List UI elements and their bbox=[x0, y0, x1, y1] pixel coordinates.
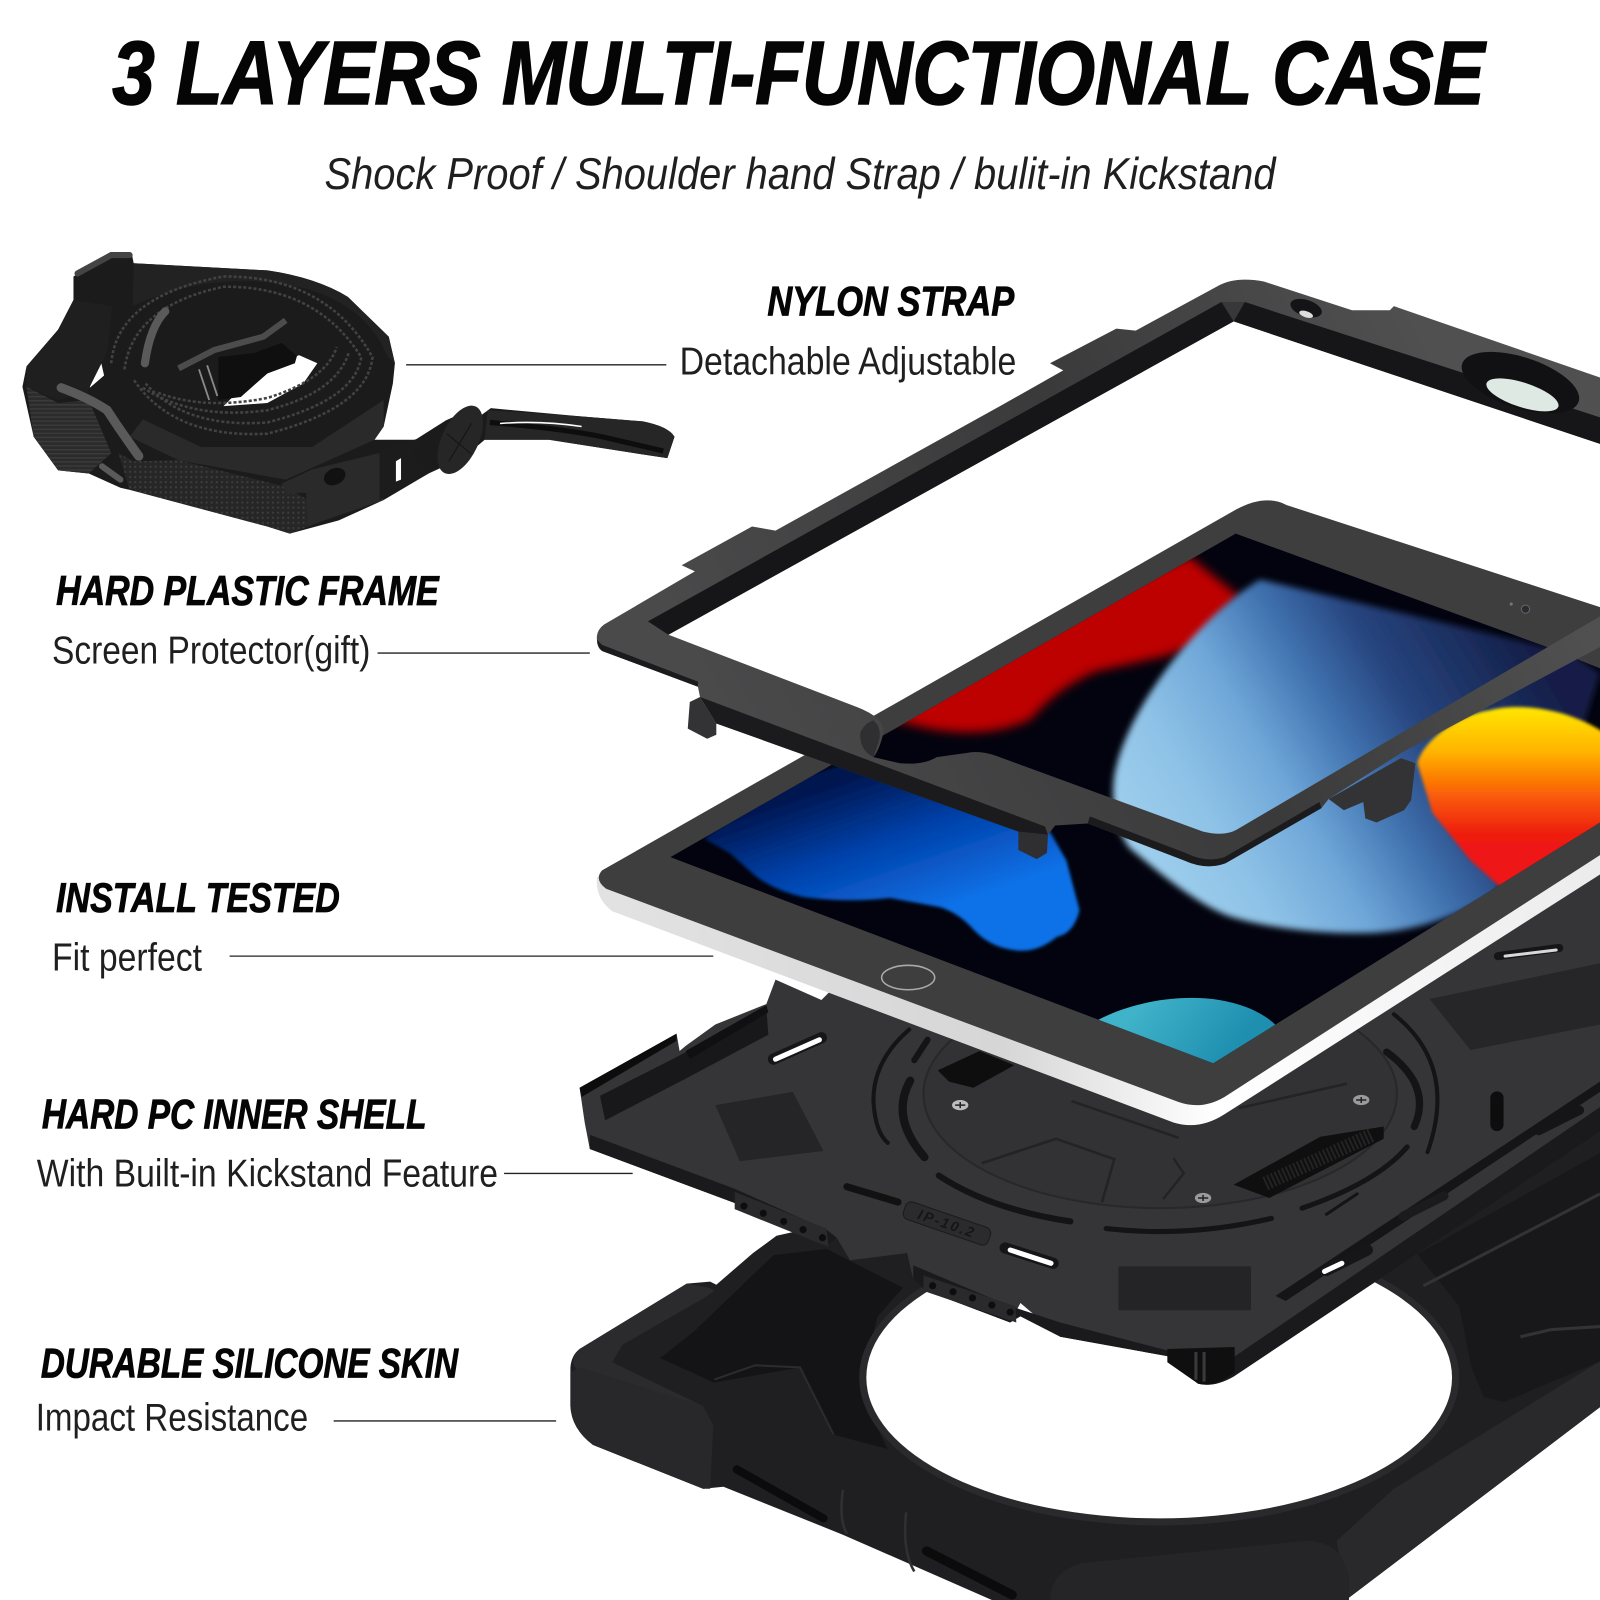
home button bbox=[882, 965, 935, 990]
label: durable silicone skin: Impact Resistance bbox=[36, 1397, 308, 1440]
rotating disk bbox=[873, 980, 1437, 1232]
round hole bbox=[866, 1237, 1452, 1518]
inner wall shadow bbox=[648, 302, 1600, 635]
leader line: strap bbox=[406, 364, 666, 366]
connector with holes left bbox=[735, 1192, 829, 1247]
camera bbox=[1510, 603, 1530, 613]
screen wallpaper bbox=[653, 510, 1600, 1082]
layer: hard pc inner shell bbox=[580, 857, 1600, 1385]
subtitle: Shock Proof / Shoulder hand Strap / bulit-in Kickstand bbox=[324, 148, 1277, 199]
corner hinge bbox=[1167, 1347, 1235, 1385]
right rim ledge bbox=[1276, 1082, 1600, 1301]
label: hard plastic frame: Screen Protector(gift) bbox=[52, 629, 370, 672]
grip pads bbox=[715, 1092, 823, 1161]
model label: IP-10.2 bbox=[915, 1207, 978, 1242]
lower kickstand bump bbox=[1050, 1541, 1349, 1600]
leader line: frame bbox=[378, 652, 590, 654]
label: durable silicone skin: DURABLE SILICONE SKIN bbox=[41, 1340, 459, 1387]
leader line: shell bbox=[504, 1172, 633, 1174]
notch bevel bbox=[860, 720, 880, 757]
hole rim bbox=[859, 1230, 1459, 1526]
black block bbox=[938, 1051, 1014, 1088]
leader line: silicone bbox=[334, 1420, 556, 1422]
screws bbox=[952, 1095, 1369, 1203]
coil webbing bbox=[111, 277, 372, 434]
lower plastic buckle bbox=[282, 437, 429, 527]
metal slider rings bbox=[61, 255, 165, 480]
label: hard pc inner shell: With Built-in Kickstand Feature bbox=[37, 1153, 498, 1196]
wrist loop bbox=[485, 410, 674, 458]
side slots bbox=[737, 1469, 823, 1518]
frame body bbox=[597, 280, 1600, 866]
label: hard plastic frame bbox=[52, 567, 440, 672]
snap clips bbox=[688, 697, 716, 739]
label: hard pc inner shell bbox=[37, 1091, 498, 1196]
leather tab bbox=[428, 399, 492, 481]
wide lower band bbox=[130, 400, 384, 480]
strap center opening bbox=[223, 355, 317, 406]
silver edge bbox=[597, 847, 1600, 1125]
outer band top bbox=[133, 263, 395, 363]
layer: silicone skin bbox=[570, 1102, 1600, 1600]
side wall recess bbox=[600, 1008, 768, 1120]
label: nylon strap bbox=[680, 277, 1016, 383]
layer: hard plastic frame bbox=[597, 280, 1600, 866]
frame edge strips bbox=[597, 640, 1321, 866]
label: hard plastic frame: HARD PLASTIC FRAME bbox=[56, 567, 440, 614]
corner bumper block bbox=[570, 1367, 713, 1489]
camera cutout bbox=[1288, 295, 1324, 321]
slots bbox=[773, 948, 1580, 1271]
rear camera opening bbox=[1454, 339, 1587, 426]
label: install tested: Fit perfect bbox=[52, 936, 202, 979]
bezel bbox=[599, 500, 1600, 1105]
leader line: install bbox=[230, 955, 713, 957]
center plastic buckle bbox=[179, 320, 297, 400]
left band bbox=[27, 387, 111, 473]
label: install tested: INSTALL TESTED bbox=[56, 874, 340, 921]
label: nylon strap: Detachable Adjustable bbox=[680, 340, 1016, 383]
right kickstand recess bbox=[1417, 1153, 1600, 1402]
velcro webbing bbox=[118, 453, 308, 534]
label: nylon strap: NYLON STRAP bbox=[767, 277, 1014, 324]
product: nylon strap bbox=[22, 253, 674, 534]
label: durable silicone skin bbox=[36, 1340, 459, 1440]
bottom lip bbox=[590, 1135, 837, 1247]
layer: ipad bbox=[597, 500, 1600, 1125]
right ridge bbox=[1337, 1361, 1600, 1600]
label: install tested bbox=[52, 874, 340, 979]
hand strap bbox=[1234, 1127, 1384, 1198]
model label bbox=[901, 1200, 992, 1247]
label: hard pc inner shell: HARD PC INNER SHELL bbox=[42, 1091, 427, 1138]
corner lip bbox=[573, 1284, 714, 1406]
connector with holes right bbox=[923, 1276, 1016, 1322]
inner recess bbox=[660, 1249, 903, 1449]
